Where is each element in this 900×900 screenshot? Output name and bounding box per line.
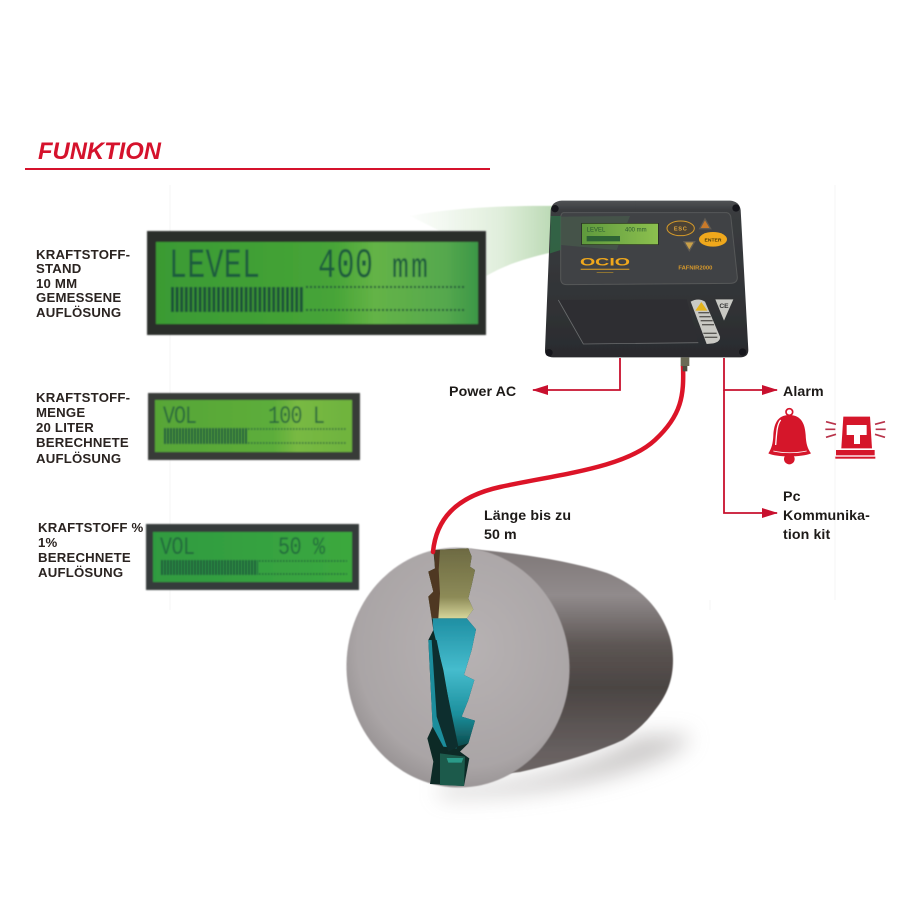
label: fuel percent: 1% [38,535,58,550]
label: fuel level: KRAFTSTOFF- [36,247,130,262]
display: level 400 mm: LEVEL [169,242,260,290]
cable gland [681,357,689,366]
label: PC communication kit: Kommunika- [783,508,870,524]
display: vol 100 L: VOL [163,402,197,431]
display: vol 50 %: 50 % [278,533,325,562]
device: control unit: 400 mm [625,227,647,233]
label: fuel percent: KRAFTSTOFF % [38,520,144,535]
cable [433,366,683,552]
display: level 400 mm: mm [392,248,428,288]
label: fuel level: AUFLÖSUNG [36,305,121,320]
icon: siren [825,417,886,459]
device: control unit: LEVEL [587,227,606,233]
label: fuel level: STAND [36,261,81,276]
logo: OCIO [580,256,631,268]
arrow: power AC [533,358,620,390]
label: fuel volume: 20 LITER [36,420,94,435]
screws [551,205,559,212]
tank cutaway [427,548,476,786]
arrow: PC communication [724,390,777,513]
label: fuel volume: AUFLÖSUNG [36,451,121,466]
label: cable length: Länge bis zu [484,508,571,524]
CE mark [715,299,733,321]
green light beam from device to display [410,206,562,276]
title: FUNKTION [38,138,162,165]
label: cable length [484,508,571,543]
display: level 400 mm [147,231,486,335]
label: alarm: Alarm [783,384,824,400]
arrow: alarm [724,358,777,390]
label: power AC: Power AC [449,384,516,400]
enclosure [545,201,748,357]
label: fuel percent [38,520,144,580]
device: control unit: CE [719,303,729,310]
tank front face [338,540,578,795]
tank [338,540,690,796]
warning label [691,299,720,344]
label: fuel volume: KRAFTSTOFF- [36,390,130,405]
label: fuel level [36,247,130,320]
device: control unit: FAFNIR2000 [678,265,712,271]
buttons [667,221,694,236]
display: vol 50 % [146,524,359,590]
label: fuel percent: BERECHNETE [38,550,131,565]
device: control unit: ENTER [705,237,722,243]
screen [582,223,658,245]
tank shadow [440,735,690,796]
device: control unit [545,201,748,371]
label: fuel level: GEMESSENE [36,290,121,305]
label: fuel level: 10 MM [36,276,77,291]
display: level 400 mm: 400 [318,242,373,290]
label: fuel percent: AUFLÖSUNG [38,565,123,580]
display: vol 100 L [148,393,360,460]
display: vol 100 L: 100 L [268,402,325,431]
label: fuel volume: MENGE [36,405,85,420]
label: fuel volume: BERECHNETE [36,435,129,450]
label: PC communication kit [783,489,870,543]
icon: bell [768,409,811,464]
label: cable length: 50 m [484,527,517,543]
device: control unit: ESC [674,227,687,233]
display: vol 50 %: VOL [160,533,195,562]
tank body [450,549,673,780]
label: fuel volume [36,390,130,466]
lower recess [558,299,698,344]
label: PC communication kit: tion kit [783,527,830,543]
label: PC communication kit: Pc [783,489,801,505]
